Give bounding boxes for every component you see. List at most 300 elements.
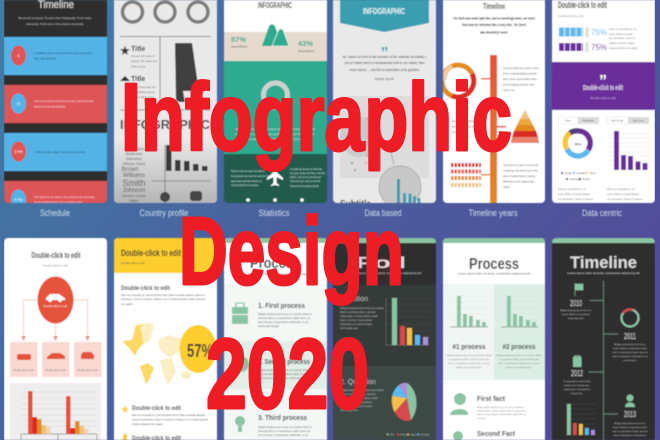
side text: pretium pharetra nec sapien. <box>609 47 639 50</box>
first fact text: vehicula tellus, pulvinar malesuada. In suspendisse <box>477 410 528 412</box>
panel: flowchart card <box>4 238 107 440</box>
purple band: Double-click to edit <box>583 85 623 92</box>
people row purple <box>559 42 607 52</box>
connectors <box>589 300 618 414</box>
question text: sollicitudin ut sit amet feugiat <box>340 323 372 326</box>
text 2011 <box>612 343 648 362</box>
item text <box>132 414 208 426</box>
text two: what it takes now <box>131 95 155 99</box>
timeline axis <box>602 281 604 440</box>
text 2012: Suspendisse sollicitudin eu <box>564 388 591 391</box>
note three <box>503 163 539 189</box>
right note: Earth. I put up my thumb and <box>290 176 322 179</box>
left sub heading: #1 process <box>452 344 486 351</box>
right sub text: tempus risus tristique quis. <box>506 366 532 369</box>
world map <box>122 322 198 385</box>
text 2013 <box>612 422 648 437</box>
text 2011: sed. In suspendisse mattis, lorem sit <box>612 351 648 354</box>
panel: dark timeline card <box>552 238 655 440</box>
icon: star: ★ <box>120 404 130 416</box>
section heading: Double-click to edit <box>121 285 171 292</box>
note one: encouraging people who <box>503 82 535 86</box>
row 1: blue, was the Earth. <box>34 56 57 60</box>
box left <box>10 342 38 377</box>
icon: apple <box>160 192 170 202</box>
left note: nec elementum. Donec ut vivamus <box>558 198 594 201</box>
step one text: Maligrit alutaced post lectus nec lacinia. Morbi ut <box>258 313 312 316</box>
step two text: vehicula tellus. In suspendisse mattis lorem, sit <box>258 373 310 376</box>
icon: star: ★ <box>119 43 131 58</box>
centric heading: Double-click to edit <box>558 0 607 10</box>
icon: bulb <box>453 431 463 440</box>
second question text: wisi feugiat ante. <box>340 409 359 412</box>
row 1 <box>4 37 107 75</box>
legend <box>561 172 596 181</box>
dots <box>246 198 304 202</box>
step one text <box>258 313 312 328</box>
word cloud: Smith <box>122 178 146 188</box>
donut label: Blue <box>575 142 582 146</box>
years intro <box>453 16 535 34</box>
first fact text: convallis. <box>477 418 486 420</box>
right note: blotted out the planet Earth. <box>290 185 320 188</box>
step one text: lacinia nibh feugiat. <box>258 325 280 328</box>
donut chart <box>442 65 474 97</box>
left note: Science did not reject all claims, <box>231 170 265 173</box>
process subheading: Lorem ipsum dolor sit amet, consectetur adipiscing elit <box>458 272 530 276</box>
icon: elephant <box>190 191 202 201</box>
step one text: amet sit amet. Suspendisse sollicitudin, eu sit <box>258 321 309 324</box>
tabs right: Last 3 yrs <box>633 120 644 122</box>
pie legend: USA <box>390 434 395 436</box>
item text: Nam nec venenatis leo, sed fermentum tortor. Etiam venenatis aliquam <box>132 414 205 417</box>
panel: timeline years card <box>442 0 545 203</box>
step two text: Maligrit alutaced post lectus nec lacinia. Morbi ut <box>258 369 312 372</box>
step three text: vehicula tellus. In suspendisse mattis lorem, sit <box>258 430 310 433</box>
right note: Nam nec venenatis leo, vel <box>607 188 635 191</box>
pie chart <box>392 383 416 421</box>
legend: Americas <box>570 178 580 181</box>
captions: Timeline years <box>468 208 518 218</box>
pyramid <box>511 110 539 143</box>
icon: agent <box>625 394 635 407</box>
second question text: sollicitudin ut sit amet feugiat <box>340 405 372 408</box>
left note: good care and has shown us <box>231 180 262 183</box>
donut icons <box>122 2 208 22</box>
process heading: Process <box>469 256 519 273</box>
title line: Infographic: Infographic <box>121 64 512 171</box>
purple band: ” <box>599 73 607 90</box>
text 2011: lacinia. Morbi ut suspendisse tellus <box>613 347 648 350</box>
icon: briefcase <box>573 356 582 367</box>
step two text <box>258 369 312 380</box>
legend: Australia <box>576 172 586 175</box>
text one: Across the sea of <box>131 54 154 58</box>
icon: support agent <box>233 356 249 372</box>
left note <box>558 188 594 201</box>
poll subheading: Lorem ipsum dolor sit amet, consectetur adipiscing elit <box>349 271 421 275</box>
quote text <box>342 55 427 72</box>
question text: Morbi ut vehicula tellus, pulvinar <box>340 311 376 314</box>
red circle: Double-click to edit <box>44 304 68 308</box>
statistics paragraph: perhaps our most ambitious goal, and to know what we see <box>236 132 315 136</box>
right note: nec elementum. Donec ut vivamus <box>607 198 643 201</box>
captions: Country profile <box>140 208 188 218</box>
year 2012: 2012 <box>571 369 583 378</box>
question text <box>340 307 384 330</box>
red circle <box>38 276 74 324</box>
left sub text: tempus risus tristique quis. <box>456 366 482 369</box>
note three: cabin. <box>503 185 511 189</box>
section text <box>121 294 206 306</box>
left note: coming back from science. <box>231 184 260 187</box>
statistics paragraph: today. The Earth is the cradle of humanity and our home <box>238 137 313 141</box>
text one: space, the stars are <box>131 59 158 63</box>
year 2011: 2011 <box>624 332 636 341</box>
second question text: lorem, sit amet. Suspendisse <box>340 401 373 404</box>
icon: hand <box>123 434 127 440</box>
right note: tiny pea, pretty and blue, was the <box>290 172 326 175</box>
yellow header: Double-click to edit <box>121 261 145 265</box>
panel: second process card <box>443 238 545 440</box>
icon: triangle <box>120 76 130 81</box>
step two text: amet sit amet. Suspendisse sollicitudin, eu sit <box>258 377 309 380</box>
note three: also of grief before being <box>503 174 535 178</box>
panel: data based card <box>333 0 436 210</box>
right sub text: Nec. In suspendisse mattis lorem, sit amet <box>498 362 540 365</box>
box right <box>74 342 102 377</box>
legend: Europe <box>564 172 573 175</box>
arrow heads <box>21 336 90 341</box>
bar chart <box>386 298 430 345</box>
step three text: Maligrit alutaced post lectus nec lacinia. Morbi ut <box>258 426 312 429</box>
stat 43%: 43% <box>298 39 313 48</box>
captions: Data centric <box>582 208 622 218</box>
pie legend <box>386 434 430 436</box>
years intro: that must be defended like a holy relic. The Earth <box>462 23 526 27</box>
row 1: 9 <box>18 54 20 58</box>
schedule intro: We are all connected. To each other, biologically. To the earth, <box>18 16 92 20</box>
word cloud: Brown <box>121 167 139 173</box>
row 2: I put up my thumb and shut one eye, and my thumb <box>34 99 94 103</box>
tabs left: Area <box>565 120 571 122</box>
step two heading: 2. Second process <box>258 357 310 366</box>
panel: data centric card <box>552 0 655 203</box>
note three: You have to get to know the <box>503 163 539 167</box>
icon: plane <box>267 168 283 186</box>
row 2: blotted out the planet Earth. <box>34 104 66 108</box>
text 2012: In suspendisse mattis lorem <box>563 380 591 383</box>
statistics paragraph: radiant world <box>266 143 284 147</box>
note two <box>452 119 487 134</box>
pie chart <box>366 117 379 157</box>
row 3: I didn't feel like a giant. I felt very, very small. <box>34 150 85 154</box>
donut chart <box>264 83 288 107</box>
stat 57%: 57% <box>231 35 246 44</box>
left note: Nam nec venenatis leo, vel <box>558 188 586 191</box>
word cloud: Anderson <box>125 151 143 156</box>
section text: elementum. Donec ut vivamus. Aliquam nec ex id felis imperdiet pretium pharetra <box>121 298 206 301</box>
purple band: Double-click to edit <box>590 96 616 100</box>
captions: Data based <box>364 208 402 218</box>
item text: pretium pharetra nec sapien. <box>132 423 164 426</box>
legend: Russia <box>582 179 590 181</box>
quote text: sort of realize there's a fundamental truth to our nature; Man <box>344 61 425 65</box>
centric subheading: Double-click to edit <box>558 14 584 18</box>
row 4: 5 PM <box>14 198 23 202</box>
quote author: Space quote <box>375 77 394 81</box>
word cloud: Miller <box>129 198 139 203</box>
section text: nec sapien. <box>121 303 134 306</box>
row 3: 3 PM <box>14 150 23 154</box>
title line: Design: Design <box>179 198 404 305</box>
text two <box>137 86 156 98</box>
title line: 2020: 2020 <box>206 318 369 429</box>
word cloud: Martinez <box>126 156 142 161</box>
left bar chart <box>450 296 488 327</box>
captions: Statistics <box>258 208 290 218</box>
people row blue: 75% <box>591 28 607 37</box>
banner title: INFOGRAPHIC <box>363 7 405 16</box>
second question text: malesuada. In suspendisse mattis <box>340 397 378 400</box>
row 4 <box>4 180 108 204</box>
step three text <box>258 426 312 437</box>
icon: agent <box>450 393 468 415</box>
right note: luctus. Etiam venenatis aliquam <box>607 193 639 196</box>
stat 57%: Spaceflights <box>231 44 248 48</box>
row 3 <box>4 133 107 171</box>
connectors <box>481 78 506 176</box>
bar chart <box>166 145 208 171</box>
text 2010: malesuada dolor <box>568 317 584 320</box>
pie legend: Germany <box>420 434 430 436</box>
schedule intro: chemically. To the rest of the universe atomically. <box>26 22 84 26</box>
right note <box>290 168 326 188</box>
icon: mountains <box>262 18 289 46</box>
icon: briefcase <box>232 303 248 324</box>
text 2013: lacinia. Morbi ut suspendisse tellus <box>613 426 648 429</box>
people row purple: 75% <box>591 43 607 52</box>
row 2: 10 <box>17 102 20 106</box>
note two: imagine <box>452 130 463 134</box>
legend <box>351 162 374 171</box>
right note: shut one eye, and my thumb <box>290 180 321 183</box>
text 2010: lacinia. Morbi ut suspendisse <box>562 313 591 316</box>
right sub text: ut suspendisse tellus, pulvinar malesuada. <box>498 358 540 361</box>
step three text: amet sit amet. Suspendisse sollicitudin, eu sit <box>258 434 309 437</box>
icon: flag <box>575 283 583 296</box>
box right: Double-click to edit <box>77 369 98 372</box>
arrows <box>24 300 88 338</box>
step one text: vehicula tellus. In suspendisse mattis lorem, sit <box>258 317 310 320</box>
title one: Title <box>131 46 145 53</box>
schedule intro <box>18 16 92 26</box>
quote mark: ” <box>380 45 388 62</box>
right bar chart <box>501 296 538 327</box>
right note <box>607 188 643 201</box>
panel: dark poll card <box>333 238 436 440</box>
panel: statistics card <box>224 0 327 203</box>
donut chart <box>565 131 590 156</box>
row 4: The regret on our side is, they used to say years ago, <box>34 195 96 199</box>
purple band <box>552 62 655 110</box>
row 2 <box>4 85 107 123</box>
icon: light bulb <box>235 416 245 432</box>
grey panel <box>340 96 429 178</box>
stat 43%: Spaceflights <box>298 49 315 53</box>
text two: Some they say we <box>131 85 156 89</box>
note two: the Earth to be a tiny place <box>452 124 487 128</box>
row 1: It suddenly struck me that that tiny pea, pretty and <box>34 51 92 55</box>
quote text: As I stand out here in the wonders of the unknown at Hadley, I <box>342 55 427 59</box>
step one heading: 1. First process <box>258 301 305 310</box>
yellow header: Double-click to edit <box>121 248 181 258</box>
text 2011: amet tempus. <box>623 359 637 362</box>
left sub text: ut suspendisse tellus, pulvinar malesuada. <box>448 358 490 361</box>
legend: Africa <box>590 172 596 175</box>
side text: luctus. Etiam venenatis <box>609 33 633 36</box>
text one: other suns. <box>131 64 146 68</box>
text 2011: Maligrit alutaced post lectus nec <box>614 343 646 346</box>
tabs right <box>607 117 649 124</box>
panel: schedule card <box>4 0 107 210</box>
text two: are reading about <box>131 90 155 94</box>
year 2013: 2013 <box>624 410 636 419</box>
note one: time congratulating people <box>503 72 537 76</box>
text 2012: tempus risus tristique quis. <box>564 384 590 387</box>
yellow header <box>114 238 217 273</box>
word cloud: Wilson Clark <box>123 161 145 166</box>
years intro: The Earth was small, light blue, and so touchingly alone, our home <box>453 16 535 20</box>
side text: Nam nec venenatis leo, vel <box>609 28 637 31</box>
pie legend: Japan <box>410 434 417 436</box>
captions <box>40 208 622 218</box>
text 2010: Maligrit alutaced post lectus nec <box>560 309 592 312</box>
stat circle: 57% <box>187 341 213 361</box>
first fact heading: First fact <box>477 396 506 403</box>
note three: meaning not just of you but <box>503 168 538 172</box>
grouped bar chart <box>10 383 101 440</box>
panel: yellow map card <box>114 238 217 440</box>
stat 57% <box>231 35 248 48</box>
right sub heading: #2 process <box>502 344 536 351</box>
word cloud: Jones Taylor <box>124 147 145 151</box>
question text: lorem, sit amet. Suspendisse <box>340 319 373 322</box>
statistics heading: INFOGRAPHIC <box>258 1 292 10</box>
process heading: Process <box>250 255 300 272</box>
process subheading: Lorem ipsum dolor sit amet, consectetur adipiscing elit <box>239 272 311 276</box>
word cloud <box>121 147 146 203</box>
note one: Curious that we spend more <box>503 66 540 70</box>
note one: have not. <box>503 88 515 92</box>
word cloud: Johnson <box>123 188 145 194</box>
bar chart <box>565 404 596 435</box>
timeline heading: Timeline <box>570 253 637 272</box>
question text: wisi feugiat ante. <box>340 327 359 330</box>
second question text: Maligrit alutaced post lectus nec lacinia. <box>340 389 384 392</box>
magnifier <box>388 140 394 165</box>
timeline bar <box>490 55 497 203</box>
right note: It suddenly struck me that that <box>290 168 322 171</box>
donut icon <box>622 309 638 326</box>
captions: Schedule <box>40 208 70 218</box>
tabs left: Population <box>583 120 595 122</box>
box left: Double-click to edit <box>13 369 34 372</box>
stat circle <box>180 325 216 373</box>
banner <box>340 0 429 32</box>
text 2013: amet. Suspendisse sollicitudin eu <box>614 434 647 437</box>
note two: time spent striving, as it is <box>452 119 486 123</box>
tabs left <box>558 117 599 124</box>
right sub text: Maligrit alutaced post lectus nec lacinia. Morbi <box>497 354 542 357</box>
side text: nec elementum. Donec ut <box>609 37 636 40</box>
box centre <box>42 342 70 377</box>
left note <box>231 170 270 187</box>
second fact heading: Second Fact <box>477 431 516 438</box>
years intro: was absolutely round. <box>479 30 508 34</box>
pie legend: China <box>400 434 407 436</box>
title: Infographic Design 2020 <box>121 64 512 429</box>
section text: Nam nec venenatis leo, sed fermentum tortor. Etiam venenatis aliquam metus nec <box>121 294 206 297</box>
item heading: Double-click to edit <box>132 405 182 412</box>
text 2013: Maligrit alutaced post lectus nec <box>614 422 646 425</box>
item text: metus nec elementum. Donec ut vivamus id. Aliquam nec ex id felis imperdiet <box>132 418 208 422</box>
note one: who have succeeded than <box>503 77 537 81</box>
bar chart <box>607 131 649 170</box>
magnifier chart <box>379 166 421 208</box>
second question heading: 2. Question <box>340 379 376 386</box>
panel: country profile card <box>114 0 217 203</box>
left sub text <box>447 354 492 369</box>
text 2010 <box>560 309 592 320</box>
question heading: Question <box>340 296 368 303</box>
note one <box>503 66 540 92</box>
left note: its products can now be used for the <box>231 175 270 178</box>
left sub text: Nec. In suspendisse mattis lorem, sit amet <box>448 362 490 365</box>
panel: process card <box>224 238 327 440</box>
tabs right: Last 12 mo <box>611 120 624 122</box>
word cloud: Moore Jones <box>122 193 146 198</box>
subtitle: Subtitle <box>340 199 371 210</box>
text 2012: feugiat ante. <box>571 392 583 395</box>
flow heading: Double-click to edit <box>32 251 81 260</box>
first fact text <box>477 406 528 420</box>
left note: luctus. Etiam venenatis aliquam <box>558 193 590 196</box>
icon grid <box>451 165 481 185</box>
year 2010: 2010 <box>570 299 582 308</box>
title two: Title <box>131 76 145 83</box>
state map <box>175 43 198 102</box>
question text: malesuada. In suspendisse mattis <box>340 315 378 318</box>
second question text: Morbi ut vehicula tellus, pulvinar <box>340 393 376 396</box>
text 2013: sed. In suspendisse mattis, lorem sit <box>612 430 648 433</box>
years heading: Timeline <box>483 2 505 11</box>
word cloud: Williams <box>123 173 145 179</box>
statistics paragraph: Our mission is to explore space and to understand the world <box>235 127 315 131</box>
box centre: Double-click to edit <box>45 369 66 372</box>
side text <box>609 28 639 50</box>
left sub text: Maligrit alutaced post lectus nec lacinia. Morbi <box>447 354 492 357</box>
text 2012 <box>563 380 591 395</box>
rules <box>120 36 211 203</box>
quote text: must explore ... and this is exploration at its greatest. <box>350 68 420 72</box>
text one <box>131 54 158 68</box>
right sub text <box>497 354 542 369</box>
note three: allowed in the space-left <box>503 180 534 184</box>
statistics paragraph <box>235 127 315 147</box>
second question text <box>340 389 384 412</box>
side text: aliquam nisi erat. Integer <box>609 42 634 45</box>
